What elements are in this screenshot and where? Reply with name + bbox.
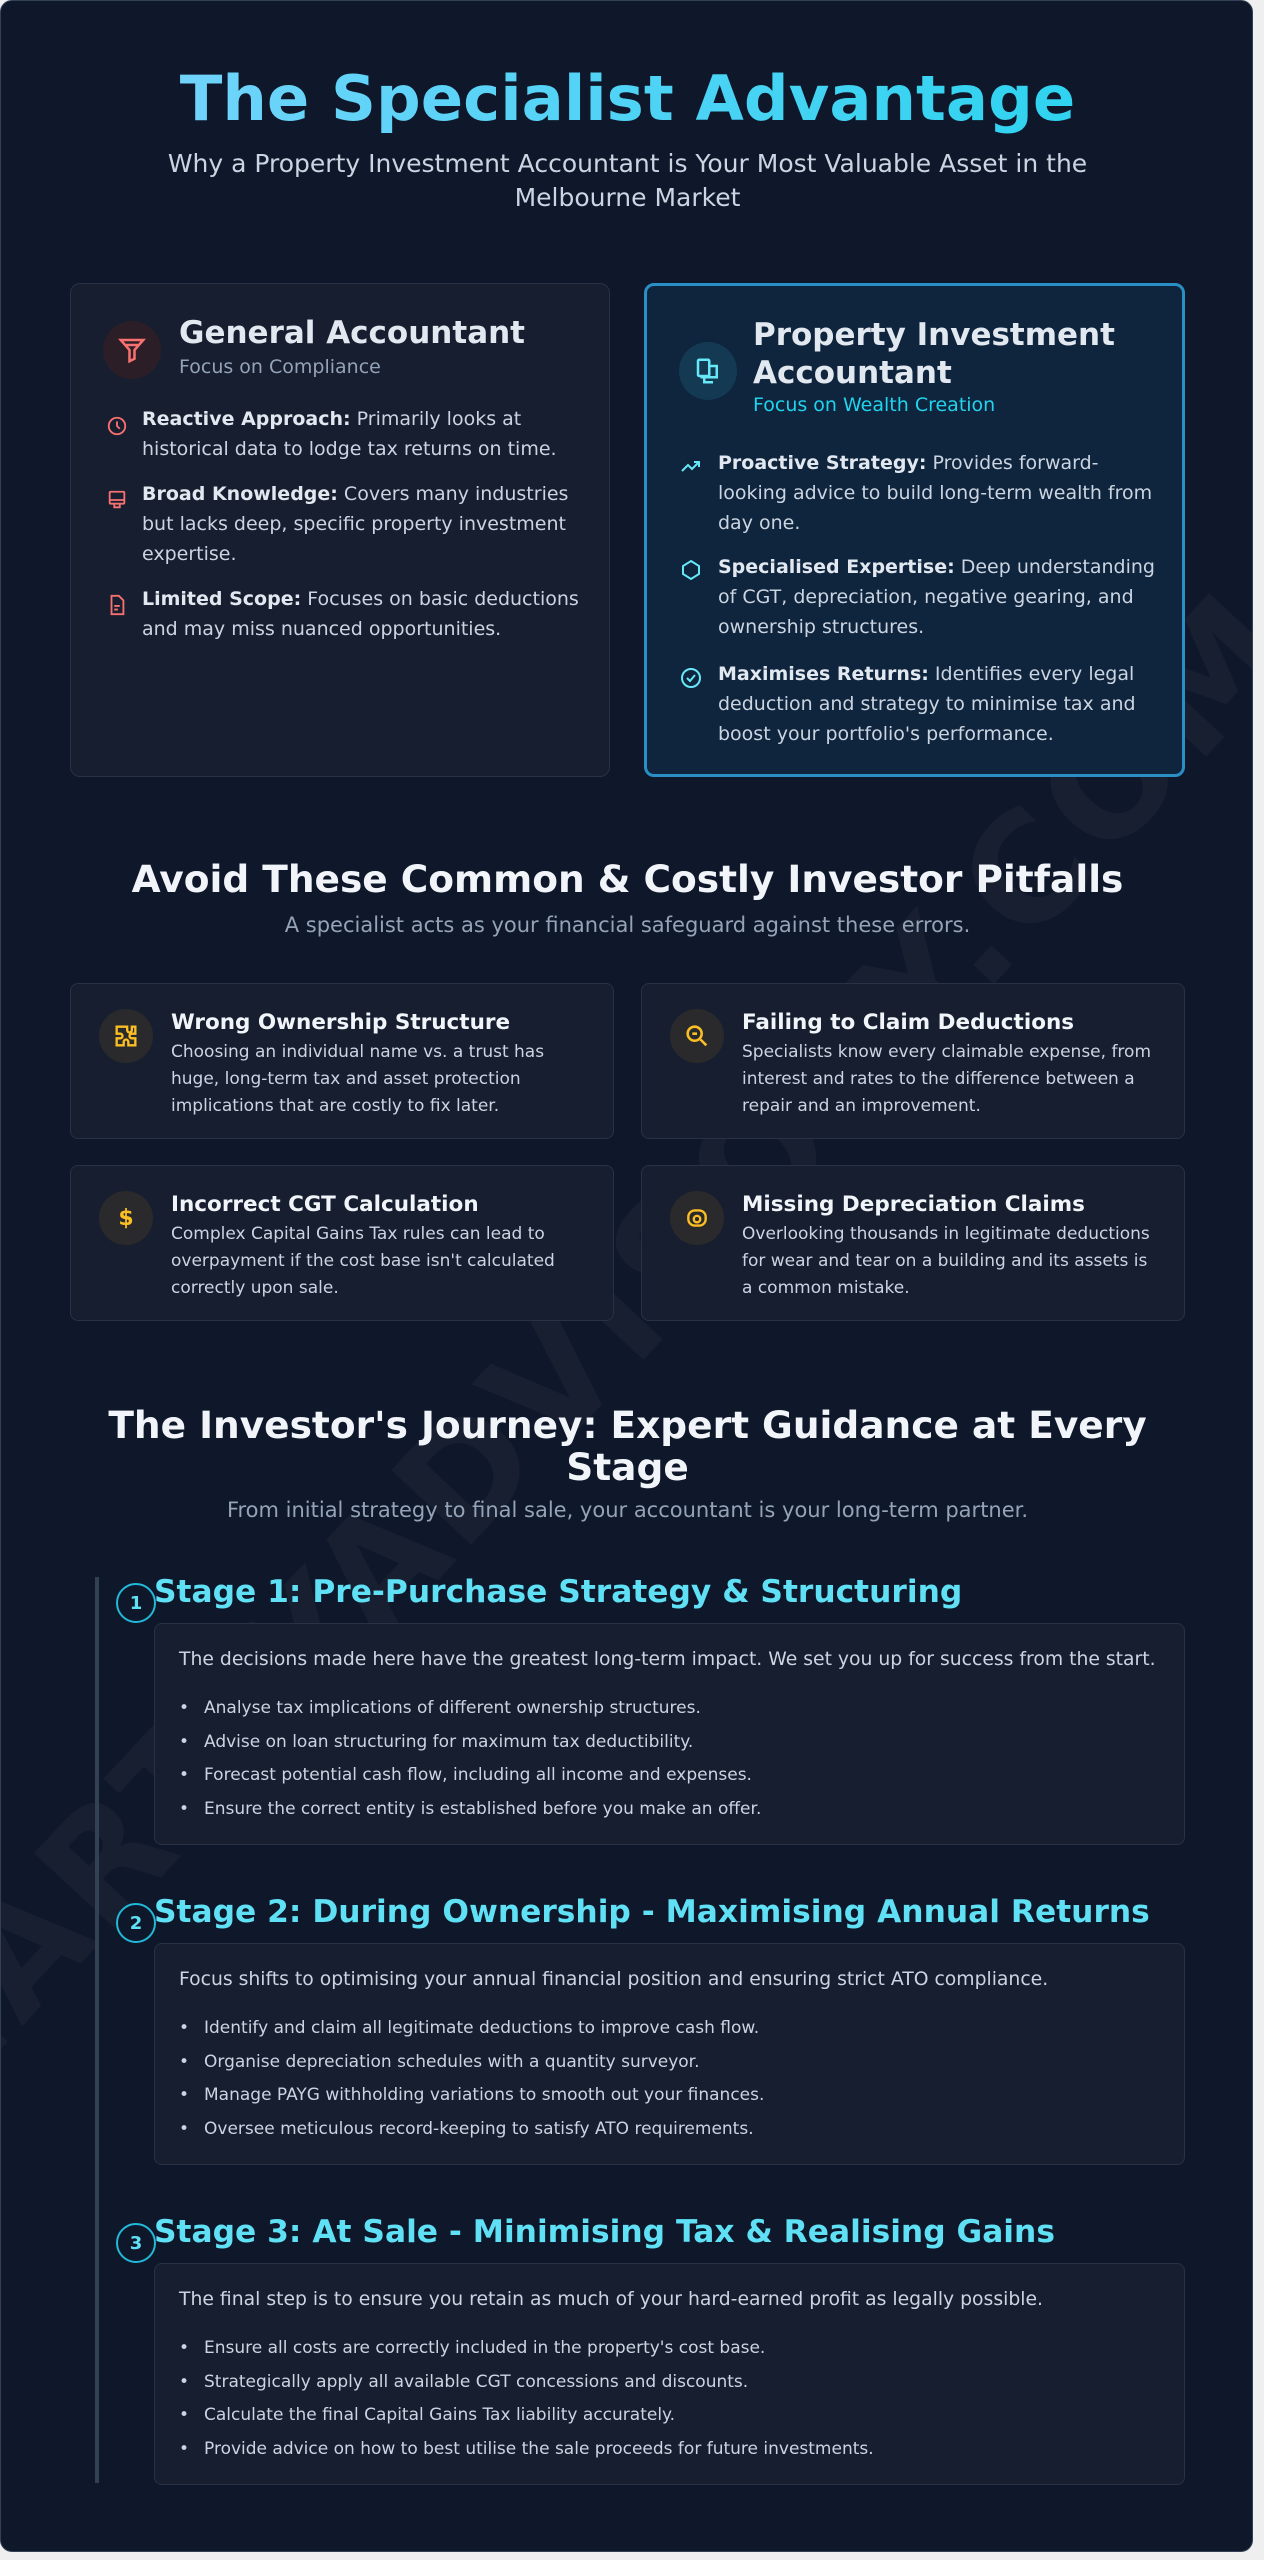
panel: general accountant (70, 283, 610, 777)
title (1, 59, 1254, 139)
stage 1: Stage 1: Pre-Purchase Strategy & Structuring (154, 1574, 962, 1610)
item: limited: Limited Scope: Focuses on basic deductions and may miss nuanced opportunities. (142, 588, 579, 640)
stage 3: Stage 3: At Sale - Minimising Tax & Realising Gains (154, 2214, 1055, 2250)
panel: property investment accountant: Focus on Wealth Creation (753, 394, 995, 416)
pitfall: cgt: $ (118, 1206, 134, 1230)
item: proactive: Proactive Strategy: Provides forward-looking advice to build long-term wealth from day one. (718, 452, 1152, 534)
panel: property investment accountant (644, 283, 1185, 777)
stage 2 (116, 1894, 1185, 2165)
icon: funnel (103, 321, 161, 379)
pitfall: depreciation: Missing Depreciation Claims (742, 1192, 1085, 1217)
stage 2: Identify and claim all legitimate deductions to improve cash flow. (204, 2018, 759, 2038)
pitfall: depreciation: Overlooking thousands in legitimate deductions for wear and tear on a building and its assets is a common mistake. (742, 1224, 1150, 1298)
item: reactive: Reactive Approach: Primarily looks at historical data to lodge tax returns on time. (142, 408, 557, 460)
stage 1: Forecast potential cash flow, including all income and expenses. (204, 1765, 752, 1785)
heading: pitfalls: Avoid These Common & Costly Investor Pitfalls (132, 857, 1123, 901)
stage 3: Calculate the final Capital Gains Tax liability accurately. (204, 2405, 675, 2425)
pitfall: deductions (641, 983, 1185, 1139)
pitfall: deductions: Specialists know every claimable expense, from interest and rates to the difference between a repair and an improvement. (742, 1042, 1151, 1116)
title: The Specialist Advantage (180, 62, 1075, 135)
pitfall: ownership (70, 983, 614, 1139)
timeline line (95, 1577, 99, 2483)
subheading: journey: From initial strategy to final sale, your accountant is your long-term partner. (227, 1498, 1028, 1522)
pitfall: deductions: Failing to Claim Deductions (742, 1010, 1074, 1035)
stage 1: Analyse tax implications of different ownership structures. (204, 1698, 701, 1718)
stage 2: 2 (130, 1912, 142, 1934)
stage 1: 1 (130, 1592, 142, 1614)
stage 2: Focus shifts to optimising your annual financial position and ensuring strict ATO compliance. (179, 1969, 1048, 1990)
icon: device (679, 342, 737, 400)
subtitle: Why a Property Investment Accountant is Your Most Valuable Asset in the Melbourne Market (168, 149, 1087, 212)
pitfall: ownership: Wrong Ownership Structure (171, 1010, 510, 1035)
pitfall: cgt: Incorrect CGT Calculation (171, 1192, 479, 1217)
stage 1: Ensure the correct entity is established before you make an offer. (204, 1798, 761, 1818)
heading: journey: The Investor's Journey: Expert Guidance at Every Stage (108, 1403, 1147, 1489)
pitfall: ownership: Choosing an individual name vs. a trust has huge, long-term tax and asset protection implications that are costly to fix later. (171, 1042, 544, 1116)
heading: Property Investment Accountant (753, 317, 1115, 391)
panel: general accountant: Focus on Compliance (179, 356, 381, 378)
item: broad: Broad Knowledge: Covers many industries but lacks deep, specific property investment expertise. (142, 483, 568, 565)
stage 2: Manage PAYG withholding variations to smooth out your finances. (204, 2085, 764, 2105)
item: maximises: Maximises Returns: Identifies every legal deduction and strategy to minimise tax and boost your portfolio's performance. (718, 663, 1136, 745)
stage 2: Stage 2: During Ownership - Maximising Annual Returns (154, 1894, 1150, 1930)
subheading: pitfalls: A specialist acts as your financial safeguard against these errors. (285, 913, 970, 937)
stage 2: Oversee meticulous record-keeping to satisfy ATO requirements. (204, 2118, 754, 2138)
stage 3: The final step is to ensure you retain as much of your hard-earned profit as legally possible. (179, 2289, 1043, 2310)
item: specialised: Specialised Expertise: Deep understanding of CGT, depreciation, negative gearing, and ownership structures. (718, 556, 1155, 638)
stage 1: Advise on loan structuring for maximum tax deductibility. (204, 1732, 693, 1752)
pitfall: cgt: Complex Capital Gains Tax rules can lead to overpayment if the cost base isn't calculated correctly upon sale. (171, 1224, 555, 1298)
pitfall: depreciation (641, 1165, 1185, 1321)
stage 3: Provide advice on how to best utilise the sale proceeds for future investments. (204, 2438, 874, 2458)
stage 3 (116, 2214, 1185, 2485)
stage 3: 3 (130, 2232, 142, 2254)
stage 2: Organise depreciation schedules with a quantity surveyor. (204, 2052, 700, 2072)
pitfall: cgt (70, 1165, 614, 1321)
stage 3: Ensure all costs are correctly included in the property's cost base. (204, 2338, 765, 2358)
heading: General Accountant (179, 315, 525, 351)
stage 1 (116, 1574, 1185, 1845)
stage 3: Strategically apply all available CGT concessions and discounts. (204, 2372, 748, 2392)
stage 1: The decisions made here have the greatest long-term impact. We set you up for success from the start. (179, 1649, 1156, 1670)
